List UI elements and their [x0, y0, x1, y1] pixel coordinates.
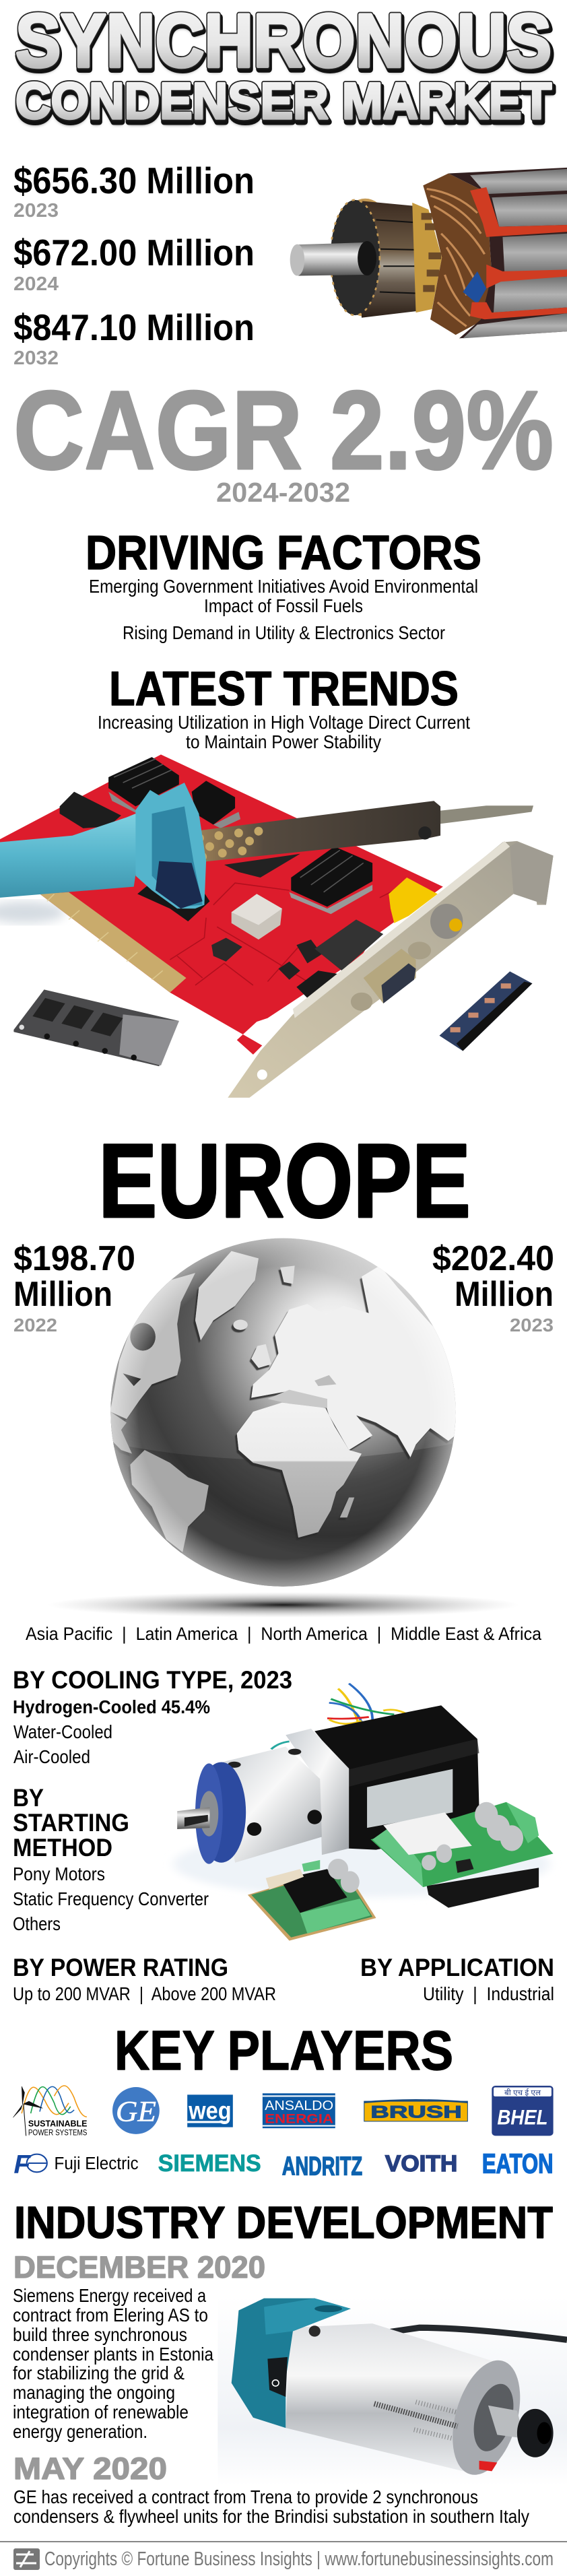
logo: Fuji Electric: Fuji Electric — [55, 2154, 139, 2173]
bracket — [228, 841, 554, 1098]
dominant segment: Hydrogen-Cooled 45.4% — [13, 1696, 210, 1717]
Europe value 2022: $198.70 — [13, 1239, 135, 1278]
logo: Brush — [364, 2100, 467, 2122]
value 2023: $656.30 Million — [13, 160, 255, 201]
logo: Siemens: SIEMENS — [158, 2150, 261, 2177]
Europe value 2023 — [432, 1239, 554, 1335]
development: December 2020 — [13, 2250, 265, 2442]
segment: power rating — [13, 1954, 276, 2004]
Europe value 2022 — [13, 1239, 135, 1335]
board components — [211, 937, 242, 962]
latest trends — [98, 663, 470, 752]
driving factors — [86, 527, 481, 643]
logo: Voith: VOITH — [385, 2151, 457, 2177]
segment: cooling type: BY COOLING TYPE, 2023 — [13, 1666, 292, 1694]
africa — [237, 1403, 362, 1538]
driving factors text: Rising Demand in Utility & Electronics Sector — [123, 622, 445, 643]
Europe value 2023: $202.40 — [432, 1239, 554, 1278]
key players heading: KEY PLAYERS — [114, 2019, 453, 2082]
heat sink 2 — [192, 781, 240, 828]
value 2032 — [13, 306, 255, 369]
cooling types — [13, 1721, 112, 1767]
driver board small — [248, 1859, 376, 1941]
logo: sustainable power systems — [13, 2086, 88, 2137]
driving factors text: Impact of Fossil Fuels — [204, 595, 363, 616]
logo: Fuji Electric — [13, 2150, 139, 2179]
logo: WEG: weg — [188, 2097, 232, 2125]
madagascar — [340, 1497, 354, 1517]
title: CONDENSER MARKET — [16, 76, 554, 133]
segment: cooling type — [13, 1666, 292, 1767]
title — [15, 0, 554, 135]
VGA connector — [351, 942, 431, 1011]
chip — [60, 792, 121, 828]
central america — [110, 1412, 132, 1453]
segment: application — [360, 1954, 554, 2004]
latest trends text: Increasing Utilization in High Voltage Direct Current — [98, 712, 470, 733]
value 2024: 2024 — [13, 273, 59, 295]
gearbox — [217, 1747, 322, 1863]
segment: starting method: BY — [13, 1784, 44, 1812]
driving factors text: Emerging Government Initiatives Avoid Environmental — [89, 576, 478, 597]
british isles — [251, 1344, 271, 1368]
Europe value 2022: Million — [13, 1275, 112, 1314]
component tape right — [439, 971, 532, 1051]
December text: managing the ongoing — [13, 2382, 175, 2403]
image: power tool — [218, 2297, 567, 2485]
heat sink 3 — [290, 847, 372, 914]
logo: BHEL: BHEL — [497, 2105, 548, 2129]
starting methods: Pony Motors — [13, 1863, 105, 1884]
footer logo — [13, 2548, 40, 2570]
December text: build three synchronous — [13, 2324, 187, 2345]
mediterranean — [267, 1390, 327, 1408]
cooling types: Water-Cooled — [13, 1721, 112, 1742]
Europe value 2023: 2023 — [510, 1315, 554, 1335]
December text: energy generation. — [13, 2421, 147, 2442]
value 2032: $847.10 Million — [13, 306, 255, 348]
logo: Ansaldo Energia — [263, 2093, 335, 2128]
segment: starting method: STARTING — [13, 1809, 129, 1837]
December text: for stabilizing the grid & — [13, 2363, 185, 2383]
segment: application: BY APPLICATION — [360, 1954, 554, 1981]
December text: Siemens Energy received a — [13, 2285, 206, 2306]
logo: GE: GE — [116, 2095, 156, 2127]
RCA connector — [430, 904, 463, 939]
May text — [13, 2486, 529, 2527]
Europe value 2023: Million — [455, 1275, 554, 1314]
eurasia — [251, 1265, 457, 1457]
logo: Ansaldo Energia: ENERGIA — [265, 2112, 333, 2126]
December text: condenser plants in Estonia — [13, 2344, 213, 2365]
value 2024 — [13, 232, 255, 295]
other regions: Asia Pacific | Latin America | North America | Middle East & Africa — [26, 1624, 542, 1644]
blue ring — [195, 1762, 246, 1864]
image: motor armature — [290, 168, 567, 338]
applications: Utility | Industrial — [423, 1983, 554, 2004]
south america — [130, 1450, 209, 1552]
globe shadow — [48, 1592, 519, 1618]
power ratings: Up to 200 MVAR | Above 200 MVAR — [13, 1983, 276, 2004]
starting methods: Others — [13, 1913, 61, 1934]
crystal — [232, 894, 282, 939]
latest trends text: to Maintain Power Stability — [186, 731, 381, 752]
great lakes — [123, 1373, 141, 1386]
iceland — [233, 1320, 248, 1330]
value 2023: 2023 — [13, 200, 59, 222]
tool head — [232, 2299, 351, 2428]
black sea — [314, 1375, 336, 1386]
latest trends: LATEST TRENDS — [109, 663, 459, 716]
segment: starting method — [13, 1784, 209, 1934]
logo: Ansaldo Energia: ANSALDO — [265, 2098, 333, 2113]
development: May 2020 — [13, 2451, 529, 2527]
footer — [13, 2548, 554, 2570]
December text: integration of renewable — [13, 2402, 189, 2422]
iron barrel — [188, 801, 440, 863]
image: geared motor and driver boards — [174, 1684, 554, 1941]
May text: GE has received a contract from Trena to provide 2 synchronous — [13, 2486, 478, 2507]
logo: Fuji Electric: F — [13, 2150, 32, 2179]
title: CONDENSER MARKET — [16, 78, 554, 135]
Europe value 2022: 2022 — [13, 1315, 57, 1335]
component tape left — [13, 989, 179, 1066]
motor body — [314, 1705, 479, 1850]
value 2024: $672.00 Million — [13, 232, 255, 273]
logo: sustainable power systems: POWER SYSTEMS — [28, 2128, 87, 2137]
logo: GE — [112, 2087, 160, 2134]
title: CONDENSER MARKET — [15, 73, 552, 130]
cooling types: Air-Cooled — [13, 1746, 90, 1767]
flange — [286, 1729, 349, 1855]
wires — [271, 1684, 405, 1749]
December text: contract from Elering AS to — [13, 2305, 208, 2325]
north america — [110, 1273, 195, 1419]
region heading: EUROPE — [98, 1123, 471, 1240]
CAGR period: 2024-2032 — [216, 477, 350, 508]
logo: Andritz: ANDRITZ — [282, 2152, 362, 2181]
image: circuit board and soldering iron — [0, 754, 554, 1098]
heat sink 4 — [224, 854, 300, 878]
end cap — [441, 2353, 554, 2482]
heat sink 1 — [108, 757, 179, 814]
title: CONDENSER MARKET — [15, 73, 552, 130]
segment: starting method: METHOD — [13, 1834, 112, 1861]
driver board large — [370, 1802, 554, 1908]
development: December 2020: DECEMBER 2020 — [13, 2250, 265, 2284]
latest trends text — [98, 712, 470, 752]
hudson bay — [130, 1323, 156, 1351]
greenland — [195, 1251, 259, 1340]
driving factors: DRIVING FACTORS — [86, 527, 481, 580]
logo: sustainable power systems: SUSTAINABLE — [28, 2119, 88, 2128]
value 2023 — [13, 160, 255, 222]
key player logos — [13, 2086, 554, 2181]
December text — [13, 2285, 213, 2442]
development: May 2020: MAY 2020 — [13, 2451, 167, 2486]
starting methods: Static Frequency Converter — [13, 1888, 209, 1909]
segment: power rating: BY POWER RATING — [13, 1954, 228, 1981]
iron tip — [439, 805, 533, 824]
board traces — [170, 883, 401, 985]
svalbard — [280, 1265, 295, 1284]
driving factors text — [89, 576, 478, 643]
market values — [13, 160, 255, 369]
logo: Brush: BRUSH — [370, 2103, 462, 2122]
output shaft — [177, 1807, 209, 1829]
scale marks — [374, 2402, 457, 2439]
iron handle — [0, 783, 206, 909]
logo: BHEL — [492, 2086, 554, 2136]
tool body — [286, 2323, 514, 2473]
value 2032: 2032 — [13, 348, 59, 369]
starting methods — [13, 1863, 209, 1934]
globe — [108, 1236, 459, 1591]
logo: BHEL: बी एच ई एल — [504, 2088, 541, 2097]
